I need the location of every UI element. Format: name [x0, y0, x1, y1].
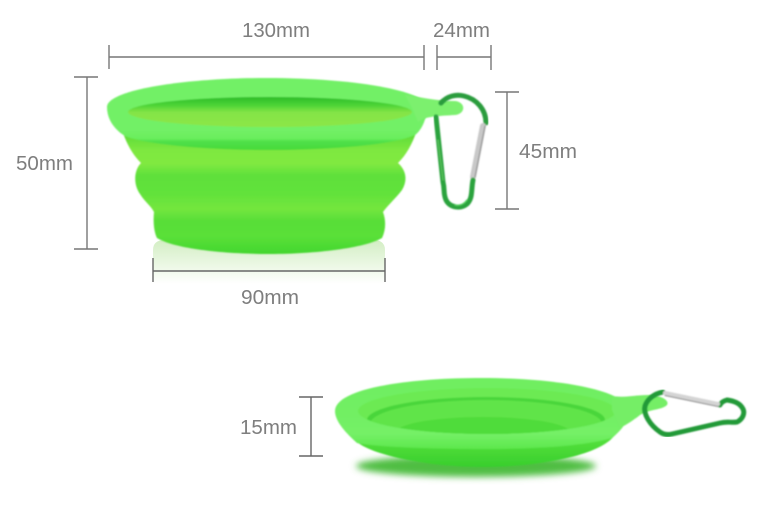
dimension: 15mm: 15mm — [240, 417, 297, 439]
dimension: 15mm — [240, 397, 323, 456]
dimension: 130mm: 130mm — [242, 20, 310, 42]
dimension: 90mm: 90mm — [241, 287, 299, 309]
dimension: 45mm: 45mm — [519, 141, 577, 163]
collapsed rim — [335, 378, 629, 449]
dimension: 24mm — [433, 20, 491, 70]
bowl opening — [128, 97, 412, 127]
dimension: 24mm: 24mm — [433, 20, 490, 42]
carabiner: expanded bowl — [436, 95, 486, 207]
dimension: 45mm — [495, 92, 577, 209]
inner folds — [358, 388, 614, 434]
dimension: 50mm — [16, 77, 98, 249]
rim — [107, 78, 427, 150]
bowl floor — [402, 417, 566, 434]
fold ring middle — [367, 396, 606, 422]
dimension: 50mm: 50mm — [16, 153, 73, 175]
expanded bowl — [107, 78, 427, 254]
collapsed bowl — [335, 378, 668, 467]
floor reflection — [153, 240, 385, 284]
tab — [612, 395, 668, 428]
collapsed base — [352, 436, 614, 467]
dimension: 130mm — [109, 20, 424, 70]
carabiner: collapsed bowl — [645, 392, 744, 435]
fold ring inner — [372, 400, 601, 428]
hanging tab — [405, 95, 463, 122]
bowl body — [122, 130, 417, 254]
dimension: 90mm — [153, 258, 385, 309]
fold ring outer — [358, 388, 614, 420]
flat bowl shadow — [356, 455, 596, 477]
